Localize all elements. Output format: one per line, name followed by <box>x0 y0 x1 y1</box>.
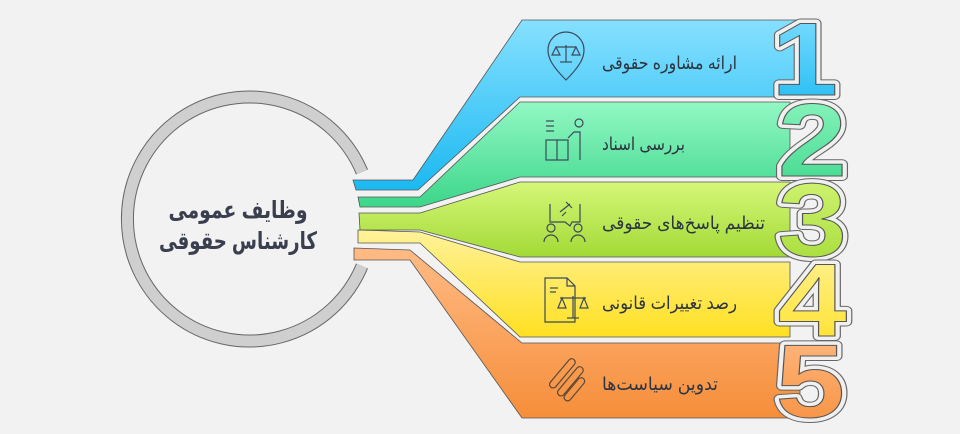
number 4: 4 <box>778 243 847 359</box>
band 3: تنظیم پاسخ‌های حقوقی <box>602 213 765 234</box>
center title: وظایف عمومی <box>168 197 308 224</box>
central circle ring <box>127 97 362 341</box>
icon: document with scales <box>545 278 588 322</box>
number 3: 3 <box>778 163 847 279</box>
number 2: 2 <box>778 83 847 199</box>
icon: scales pin <box>548 32 584 80</box>
band 3 <box>359 182 790 257</box>
number 3: 3 <box>778 163 847 279</box>
number 1: 1 <box>771 1 838 117</box>
number 4: 4 <box>778 243 847 359</box>
band 2: بررسی اسناد <box>602 134 685 155</box>
band 5 <box>354 248 800 418</box>
number 3: 3 <box>778 163 847 279</box>
icon: policy bars <box>548 357 586 402</box>
numbers <box>771 1 847 434</box>
center title <box>159 197 317 255</box>
number 4: 4 <box>778 243 847 359</box>
band 4 <box>358 230 790 337</box>
band 4: رصد تغییرات قانونی <box>602 293 737 314</box>
icon: document reviewer <box>546 119 583 160</box>
number 2: 2 <box>778 83 847 199</box>
icon: two people with gavel <box>544 202 585 242</box>
center title: کارشناس حقوقی <box>159 228 317 255</box>
number 1: 1 <box>771 1 838 117</box>
band 1 <box>353 20 800 190</box>
number 2: 2 <box>778 83 847 199</box>
band 2 <box>358 102 790 207</box>
number 1: 1 <box>771 1 838 117</box>
band 1: ارائه مشاوره حقوقی <box>602 53 737 74</box>
band 5: تدوین سیاست‌ها <box>602 374 718 395</box>
